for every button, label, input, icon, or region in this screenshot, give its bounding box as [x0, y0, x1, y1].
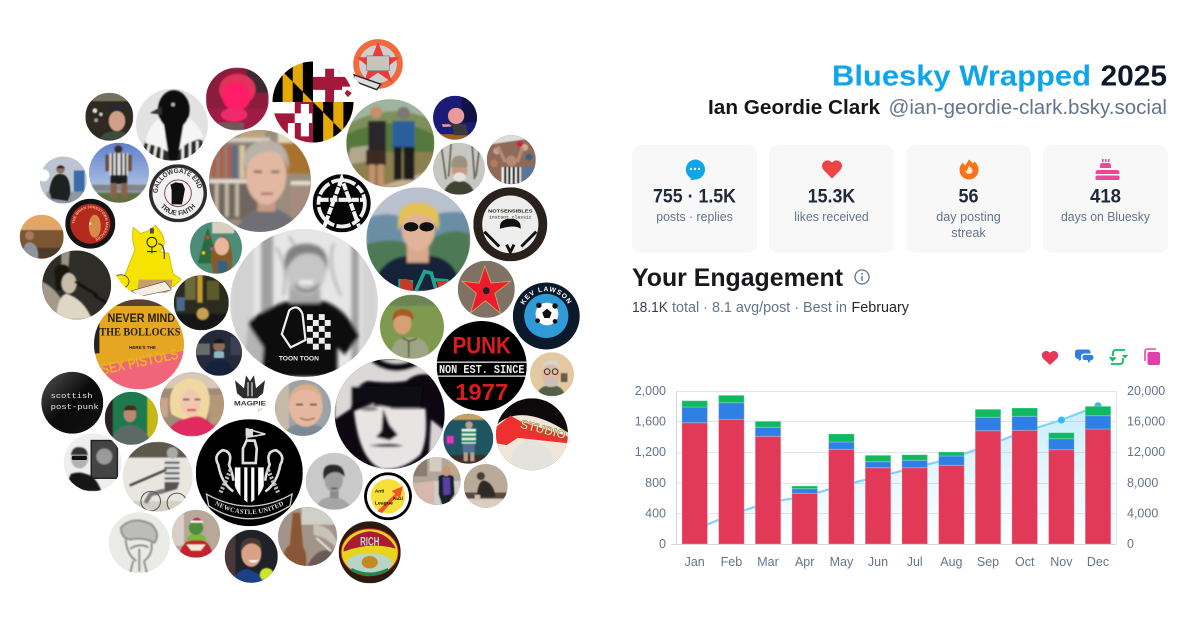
avatar: Gallowgate End badge: TRUE FAITH — [161, 203, 196, 216]
avatar: Gallowgate End badge: GALLOWGATE END — [153, 168, 202, 193]
avatar: Anti Nazi League badge: Anti — [375, 489, 384, 495]
avatar cluster — [20, 39, 580, 584]
left axis labels: 800 — [645, 476, 666, 490]
subtitle: name and handle: @ian-geordie-clark.bsky.social — [888, 97, 1167, 119]
stat card: day posting streak: 56 — [958, 186, 978, 208]
avatar: young man portrait in grey — [306, 453, 363, 510]
subtitle: name and handle: Ian Geordie Clark — [708, 97, 881, 119]
legend icons — [1042, 349, 1160, 365]
icon: replies bubbles — [1075, 350, 1094, 363]
avatar: Punk badge: 1977 — [455, 379, 508, 405]
avatar: Notsensibles badge: instant classic — [489, 214, 532, 220]
avatar: Newcastle United crest — [196, 419, 303, 526]
avatar: Studio One record label: STUDIO — [519, 417, 567, 442]
avatar: Maryland flag — [272, 62, 354, 142]
avatar: singer at microphone — [42, 250, 111, 320]
avatar: Scottish post-punk badge: post-punk — [51, 404, 99, 412]
avatar: Scottish post-punk badge: scottish — [51, 393, 92, 401]
avatar: older man in glasses — [530, 352, 574, 396]
right axis labels: 4,000 — [1127, 506, 1158, 520]
avatar: Notsensibles badge: NOTSENSIBLES — [488, 208, 533, 214]
left axis labels: 1,200 — [635, 445, 666, 459]
avatar: Anti Nazi League badge: Nazi — [393, 496, 403, 502]
avatar: main profile, man in black t-shirt: TOON TOON — [279, 356, 319, 363]
month labels: Jun — [868, 555, 888, 569]
avatar: Punk badge: NON EST. SINCE — [439, 363, 524, 377]
bar stack: replies — [682, 403, 1111, 493]
avatar: Anti Nazi League badge: League — [375, 501, 393, 507]
bar stack: reposts — [682, 395, 1111, 489]
left axis labels: 2,000 — [635, 384, 666, 398]
stat card: days on Bluesky — [1043, 145, 1168, 253]
stat card: day posting streak: streak — [951, 226, 987, 240]
avatar: vintage ink sketch — [109, 512, 170, 573]
title: Bluesky Wrapped — [832, 60, 1091, 92]
right axis labels: 20,000 — [1127, 384, 1165, 398]
left axis labels — [635, 384, 666, 551]
avatar: Karl Pilkington cartoon — [433, 96, 477, 140]
avatar: red star sticker — [353, 39, 403, 90]
avatar: Never Mind the Bollocks sleeve: HERE'S THE — [129, 345, 156, 350]
engagement summary: 18.1K — [632, 300, 668, 316]
avatar: footballer from behind — [89, 143, 149, 203]
icon: cake — [1096, 159, 1120, 180]
icon: speech bubble — [686, 159, 705, 180]
right axis labels: 16,000 — [1127, 414, 1165, 428]
avatar: Never Mind the Bollocks sleeve: NEVER MIND — [107, 312, 175, 325]
avatar: Scottish post-punk badge — [41, 372, 103, 434]
avatar: young footballer smiling — [225, 530, 278, 583]
avatar: smiling bald man — [275, 380, 331, 436]
avatar: copper still — [278, 507, 337, 566]
avatar: man with phone selfie — [196, 330, 242, 376]
icon: flame — [960, 160, 978, 180]
left axis labels: 400 — [645, 506, 666, 520]
month labels: May — [830, 555, 854, 569]
month labels: Dec — [1087, 555, 1109, 569]
avatar: couple hiking — [346, 99, 434, 187]
engagement summary — [632, 300, 910, 316]
avatar: Punk badge: PUNK — [452, 332, 511, 359]
avatar: high contrast face — [335, 359, 445, 469]
avatar: Gallowgate End badge — [149, 164, 207, 222]
month labels: Apr — [795, 555, 814, 569]
avatar: woman with christmas tree — [190, 222, 242, 274]
left axis labels: 0 — [659, 537, 666, 551]
avatar: Magpie 24/7 logo: MAGPIE — [234, 401, 267, 408]
avatar: blonde woman in pink — [160, 372, 224, 436]
stat card: likes received: likes received — [794, 210, 869, 224]
avatar: bearded man in beanie — [433, 143, 485, 195]
icon: quotes squares — [1145, 349, 1160, 365]
avatar: Never Mind the Bollocks sleeve: THE BOLLOCKS — [99, 325, 180, 338]
avatar: Anti Nazi League badge — [364, 472, 412, 520]
avatar: man in Celtic shirt — [443, 414, 493, 464]
stat card: likes received: 15.3K — [808, 186, 856, 208]
avatar: Notsensibles badge — [473, 187, 547, 261]
avatar: night street — [174, 275, 229, 330]
right axis labels: 12,000 — [1127, 445, 1165, 459]
avatar: Marmite Rich jar: RICH — [360, 534, 379, 548]
avatar: man on street — [413, 457, 461, 505]
combo chart: monthly engagement — [635, 384, 1165, 569]
right axis labels — [1127, 384, 1165, 551]
stat card: days on Bluesky: 418 — [1090, 186, 1121, 208]
month labels: Jul — [907, 555, 923, 569]
month labels — [685, 555, 1109, 569]
engagement summary: total · 8.1 avg/post · Best in — [672, 300, 847, 316]
avatar: man with tricolour flag — [105, 392, 158, 445]
avatar: Marmite Rich jar — [339, 521, 401, 583]
avatar: football crowd — [487, 135, 536, 184]
stat card: likes received — [769, 145, 894, 253]
avatar: Punk badge — [437, 321, 527, 411]
month labels: Oct — [1015, 555, 1035, 569]
avatar: Magpie 24/7 logo: 24/7 — [258, 408, 267, 413]
avatar: Kev Lawson football badge: KEV LAWSON — [520, 286, 572, 305]
stat card: days on Bluesky: days on Bluesky — [1061, 210, 1151, 224]
avatar: Newcastle United crest: NEWCASTLE UNITED — [214, 500, 284, 514]
avatar: Never Mind the Bollocks sleeve — [94, 299, 184, 389]
avatar: man with record shelves — [209, 130, 311, 232]
month labels: Jan — [685, 555, 705, 569]
avatar: Grinch in Christmas jumper — [172, 510, 220, 558]
avatar: red star pin — [458, 261, 515, 318]
month labels: Aug — [940, 555, 963, 569]
icon: reposts arrows — [1110, 350, 1128, 364]
avatar: man on plane — [37, 156, 87, 204]
cumulative area and line — [695, 402, 1102, 544]
avatar: woman in pink light — [206, 68, 269, 130]
month labels: Sep — [977, 555, 999, 569]
avatar: sepia man seated — [464, 464, 508, 508]
avatar: boy in field — [380, 295, 444, 359]
bar stack: likes — [682, 419, 1111, 544]
icon: info — [855, 270, 869, 284]
avatar: man in sunglasses with mountains — [366, 187, 470, 291]
stat card: posts and replies — [632, 145, 757, 253]
right axis labels: 0 — [1127, 537, 1134, 551]
avatar: man with camera — [85, 92, 134, 141]
heading: Your Engagement: Your Engagement — [632, 264, 844, 292]
stat card: day posting streak — [906, 145, 1031, 253]
avatar: Magpie 24/7 logo — [234, 375, 266, 412]
subtitle: name and handle — [708, 97, 1167, 119]
left axis labels: 1,600 — [635, 414, 666, 428]
avatar: man on bicycle, vintage — [123, 442, 193, 513]
right axis labels: 8,000 — [1127, 476, 1158, 490]
stat card: posts and replies: posts · replies — [656, 210, 733, 224]
icon: heart — [822, 160, 842, 178]
icon: likes heart — [1042, 351, 1058, 365]
avatar: man in sunglasses with poster — [64, 433, 122, 491]
avatar: Never Mind the Bollocks sleeve: SEX PISTOLS — [99, 346, 180, 379]
month labels: Mar — [757, 555, 779, 569]
avatar: magpie in fur collar — [136, 89, 208, 161]
avatar: yellow cartoon cat — [112, 225, 182, 296]
stacked bars — [682, 395, 1111, 544]
avatar: main profile, man in black t-shirt — [230, 229, 378, 377]
stat card: day posting streak: day posting — [936, 210, 1001, 224]
chart gridlines and axes — [676, 391, 1116, 544]
engagement summary: February — [852, 300, 910, 316]
month labels: Nov — [1050, 555, 1073, 569]
title: 2025 — [1100, 60, 1167, 92]
avatar: Brian Jonestown Massacre record: THE BRIAN JONESTOWN MASSACRE — [72, 206, 108, 241]
stat card: posts and replies: 755 · 1.5K — [653, 186, 736, 208]
avatar: sunset coast portrait — [20, 215, 64, 259]
avatar: Studio One record label — [496, 398, 568, 470]
month labels: Feb — [721, 555, 742, 569]
avatar: anarchy symbol — [313, 174, 371, 232]
avatar: Brian Jonestown Massacre record — [65, 198, 116, 249]
avatar: Kev Lawson football badge — [512, 282, 580, 350]
